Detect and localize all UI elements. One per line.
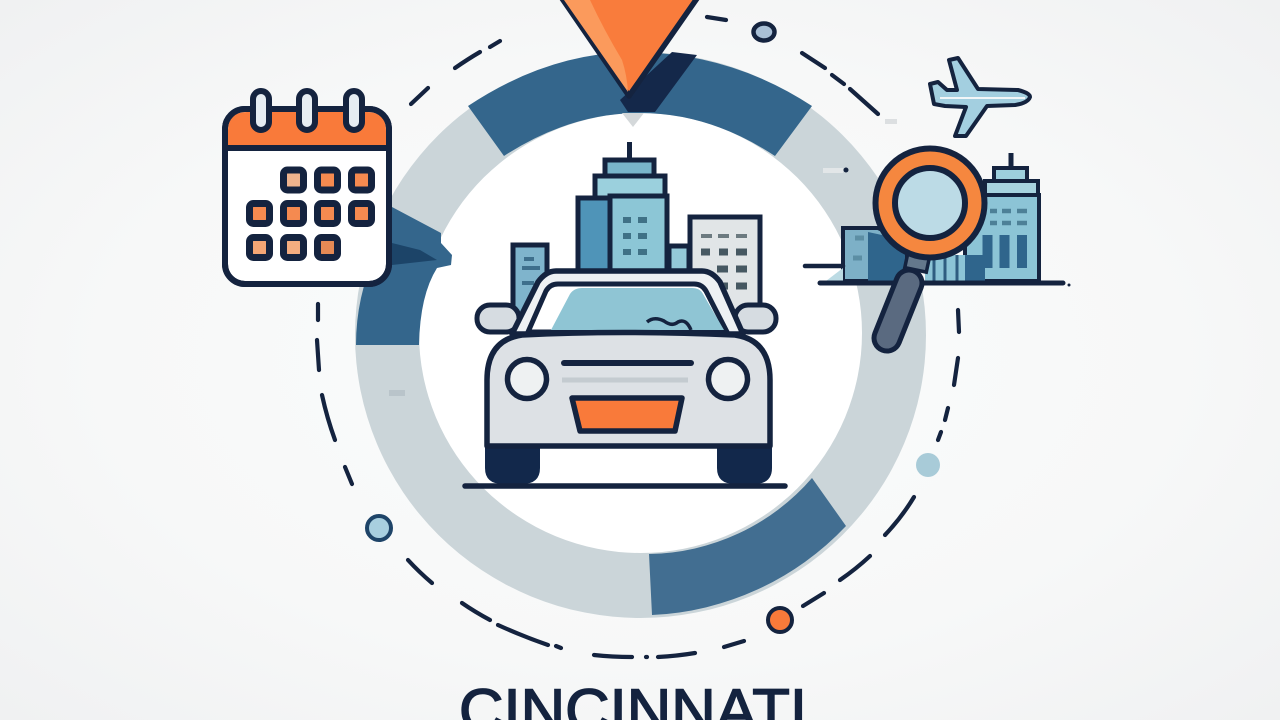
magnifier over city icon <box>805 148 1063 338</box>
magnifier handle <box>887 283 909 338</box>
wiper squiggle <box>647 319 691 330</box>
ground line <box>465 483 785 489</box>
calendar rings <box>253 91 362 130</box>
car body <box>487 332 770 446</box>
left headlight <box>508 360 546 398</box>
magnifier lens <box>896 169 964 237</box>
calendar date cells <box>250 170 372 258</box>
ring segment: top <box>468 52 812 156</box>
left mirror <box>477 305 519 332</box>
cityscape behind car <box>513 142 760 315</box>
progress ring <box>355 52 926 618</box>
small building <box>669 246 689 272</box>
tower crown <box>605 160 654 176</box>
calendar header <box>228 112 386 147</box>
calendar icon <box>225 91 389 284</box>
number plate <box>572 398 682 431</box>
wheels <box>485 440 772 484</box>
dashed orbit <box>317 17 959 657</box>
inner white disc <box>416 108 866 558</box>
tower body <box>610 196 667 272</box>
calendar page <box>225 109 389 284</box>
roof frame <box>512 271 743 334</box>
baseline <box>820 280 1063 286</box>
decorative orbit nodes <box>367 24 1070 632</box>
tower antenna <box>627 142 632 160</box>
ring segment: left with spike <box>356 207 452 345</box>
airplane icon <box>930 58 1030 136</box>
tall building right <box>1008 153 1014 168</box>
right headlight <box>708 360 748 398</box>
ring segment: bottom right <box>649 478 846 615</box>
windshield <box>528 284 727 332</box>
grille <box>564 360 691 366</box>
spike shadow <box>392 243 437 265</box>
pin shadow <box>620 52 697 112</box>
map pin <box>561 0 698 112</box>
right mirror <box>735 305 776 332</box>
left building <box>513 245 547 315</box>
magnifier rim <box>876 148 984 258</box>
magnifier neck <box>905 254 929 272</box>
car <box>477 271 776 484</box>
right building <box>690 217 760 312</box>
low buildings left <box>843 228 905 281</box>
